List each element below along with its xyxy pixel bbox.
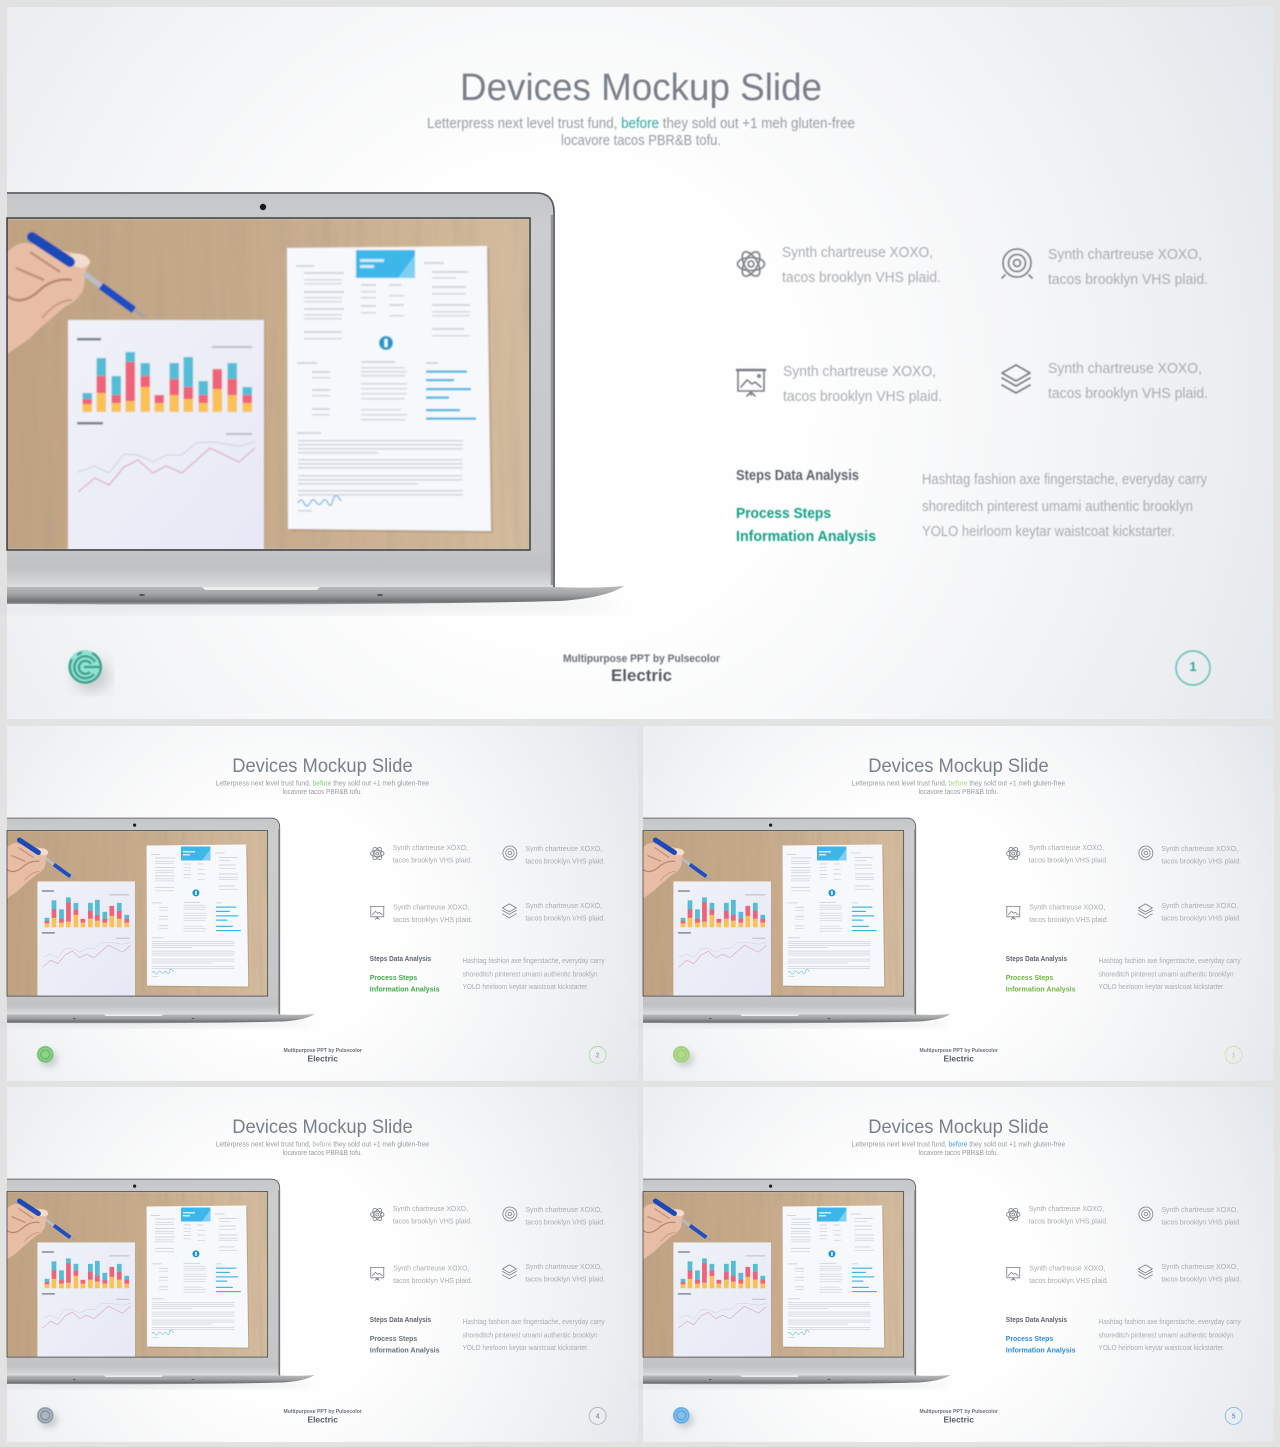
feature grid: Synth chartreuse XOXO, [525, 1205, 602, 1214]
title: Devices Mockup Slide [232, 756, 413, 777]
headings and paragraph [370, 1315, 605, 1355]
headings and paragraph: Steps Data Analysis [370, 1315, 431, 1324]
subtitle text [216, 1140, 429, 1157]
feature grid: Synth chartreuse XOXO, [525, 901, 602, 910]
subtitle text: Letterpress next level trust fund, before they sold out +1 meh gluten-free [216, 779, 429, 788]
headings and paragraph: shoreditch pinterest umami authentic brooklyn [1099, 970, 1234, 979]
headings and paragraph: YOLO heirloom keytar waistcoat kickstarter. [1099, 1343, 1225, 1352]
headings and paragraph: Information Analysis [1006, 985, 1076, 994]
feature grid: Synth chartreuse XOXO, [1029, 843, 1104, 852]
feature grid: Synth chartreuse XOXO, [393, 902, 470, 911]
icon: layers [1002, 365, 1030, 393]
feature grid: Synth chartreuse XOXO, [525, 844, 602, 853]
feature text: layers [1048, 361, 1208, 402]
feature grid: Synth chartreuse XOXO, [1029, 1263, 1106, 1272]
feature grid: tacos brooklyn VHS plaid. [393, 855, 472, 864]
subtitle text [852, 1140, 1065, 1157]
panel: main slide [0, 7, 1273, 719]
page number [1176, 651, 1210, 685]
subtitle text: locavore tacos PBR&B tofu. [283, 787, 362, 796]
title: Devices Mockup Slide [232, 1117, 413, 1138]
headings and paragraph: Steps Data Analysis [370, 954, 431, 963]
subtitle text: Letterpress next level trust fund, before they sold out +1 meh gluten-free [427, 116, 855, 132]
page number: 1 [1232, 1052, 1236, 1059]
feature text: atom: Synth chartreuse XOXO, [782, 245, 933, 261]
heading: process steps [736, 505, 876, 545]
paragraph: Hashtag fashion axe fingerstache, everyday carry [922, 472, 1208, 488]
feature grid: Synth chartreuse XOXO, [1029, 1204, 1104, 1213]
title: Devices Mockup Slide [868, 1117, 1049, 1138]
panel: slide thumbnail 2 [0, 726, 638, 1081]
subtitle text: locavore tacos PBR&B tofu. [561, 133, 721, 149]
headings and paragraph [1006, 1315, 1241, 1355]
headings and paragraph: YOLO heirloom keytar waistcoat kickstarter. [463, 1343, 589, 1352]
headings and paragraph: shoreditch pinterest umami authentic brooklyn [463, 970, 598, 979]
title: Devices Mockup Slide [460, 67, 822, 109]
feature text: target: Synth chartreuse XOXO, [1048, 247, 1202, 263]
feature grid: tacos brooklyn VHS plaid. [525, 913, 605, 922]
feature grid: tacos brooklyn VHS plaid. [1029, 915, 1108, 924]
headings and paragraph: YOLO heirloom keytar waistcoat kickstarter. [1099, 982, 1225, 991]
feature grid [370, 1204, 605, 1285]
feature grid: Synth chartreuse XOXO, [1161, 844, 1238, 853]
feature text: atom: tacos brooklyn VHS plaid. [782, 270, 941, 286]
feature text: target [1048, 247, 1208, 288]
feature text: layers: Synth chartreuse XOXO, [1048, 361, 1202, 377]
paragraph: YOLO heirloom keytar waistcoat kickstarter. [922, 524, 1175, 540]
feature grid: Synth chartreuse XOXO, [393, 1263, 470, 1272]
footer text: Electric [943, 1053, 974, 1063]
icon: atom [738, 249, 764, 279]
footer text [920, 1048, 999, 1063]
laptop mockup [0, 818, 315, 1026]
subtitle text: Letterpress next level trust fund, before they sold out +1 meh gluten-free [216, 1140, 429, 1149]
headings and paragraph: Process Steps [1006, 973, 1053, 982]
headings and paragraph: Steps Data Analysis [1006, 954, 1067, 963]
headings and paragraph: Information Analysis [370, 1346, 440, 1355]
logo [37, 1046, 58, 1067]
subtitle text: Letterpress next level trust fund, before they sold out +1 meh gluten-free [852, 779, 1065, 788]
feature grid: tacos brooklyn VHS plaid. [1161, 856, 1241, 865]
feature text: layers: tacos brooklyn VHS plaid. [1048, 386, 1208, 402]
page number [589, 1046, 606, 1063]
page number: 5 [1232, 1413, 1236, 1420]
page number [1225, 1046, 1242, 1063]
feature text: presentation: tacos brooklyn VHS plaid. [783, 389, 942, 405]
headings and paragraph: Steps Data Analysis [1006, 1315, 1067, 1324]
headings and paragraph: Process Steps [1006, 1334, 1053, 1343]
headings and paragraph: Hashtag fashion axe fingerstache, everyday carry [463, 956, 605, 965]
feature grid: tacos brooklyn VHS plaid. [393, 1216, 472, 1225]
page number [589, 1407, 606, 1424]
feature grid: tacos brooklyn VHS plaid. [525, 1274, 605, 1283]
icon: target [1002, 249, 1032, 278]
footer text [284, 1409, 363, 1424]
headings and paragraph: Hashtag fashion axe fingerstache, everyday carry [1099, 1317, 1241, 1326]
footer text: Multipurpose PPT by Pulsecolor [284, 1409, 363, 1415]
panel: slide thumbnail 4 [0, 1087, 638, 1442]
paragraph: shoreditch pinterest umami authentic brooklyn [922, 499, 1193, 515]
headings and paragraph: Process Steps [370, 973, 417, 982]
feature text: presentation: Synth chartreuse XOXO, [783, 364, 936, 380]
feature text: presentation [783, 364, 942, 405]
laptop mockup [0, 1179, 315, 1387]
footer text [920, 1409, 999, 1424]
headings and paragraph [370, 954, 605, 994]
panel: slide thumbnail 3 [630, 726, 1274, 1081]
footer text: Electric [307, 1053, 338, 1063]
feature grid: tacos brooklyn VHS plaid. [393, 915, 472, 924]
title: Devices Mockup Slide [868, 756, 1049, 777]
feature grid: Synth chartreuse XOXO, [393, 1204, 468, 1213]
headings and paragraph: Hashtag fashion axe fingerstache, everyday carry [1099, 956, 1241, 965]
feature grid: tacos brooklyn VHS plaid. [393, 1276, 472, 1285]
page number: 1 [1189, 659, 1197, 674]
laptop mockup with photo of charts and resume [0, 192, 624, 611]
headings and paragraph: shoreditch pinterest umami authentic brooklyn [463, 1331, 598, 1340]
feature text: atom [782, 245, 941, 286]
feature grid: tacos brooklyn VHS plaid. [525, 1217, 605, 1226]
feature grid: tacos brooklyn VHS plaid. [525, 856, 605, 865]
headings and paragraph: Process Steps [370, 1334, 417, 1343]
headings and paragraph: Information Analysis [370, 985, 440, 994]
heading: process steps: Information Analysis [736, 528, 876, 545]
footer text [563, 653, 721, 685]
logo [673, 1046, 694, 1067]
footer text: Multipurpose PPT by Pulsecolor [284, 1048, 363, 1054]
feature grid: Synth chartreuse XOXO, [1029, 902, 1106, 911]
page number: 2 [596, 1052, 600, 1059]
laptop mockup [630, 818, 951, 1026]
footer text: Multipurpose PPT by Pulsecolor [920, 1048, 999, 1054]
feature grid: Synth chartreuse XOXO, [525, 1262, 602, 1271]
feature grid: tacos brooklyn VHS plaid. [1029, 1276, 1108, 1285]
panel: slide thumbnail 5 [630, 1087, 1274, 1442]
headings and paragraph: shoreditch pinterest umami authentic brooklyn [1099, 1331, 1234, 1340]
footer text: Electric [611, 666, 672, 685]
footer text: Multipurpose PPT by Pulsecolor [563, 653, 721, 665]
feature grid: tacos brooklyn VHS plaid. [1161, 913, 1241, 922]
headings and paragraph: YOLO heirloom keytar waistcoat kickstarter. [463, 982, 589, 991]
footer text: Multipurpose PPT by Pulsecolor [920, 1409, 999, 1415]
subtitle text: locavore tacos PBR&B tofu. [919, 787, 998, 796]
page number: 4 [596, 1413, 600, 1420]
page number [1225, 1407, 1242, 1424]
footer text: Electric [943, 1414, 974, 1424]
subtitle text: locavore tacos PBR&B tofu. [283, 1148, 362, 1157]
feature grid: tacos brooklyn VHS plaid. [1029, 855, 1108, 864]
footer text: Electric [307, 1414, 338, 1424]
logo [673, 1407, 694, 1428]
feature grid: tacos brooklyn VHS plaid. [1029, 1216, 1108, 1225]
feature grid: Synth chartreuse XOXO, [1161, 1205, 1238, 1214]
footer text [284, 1048, 363, 1063]
feature grid [1006, 1204, 1241, 1285]
feature grid [370, 843, 605, 924]
feature grid [1006, 843, 1241, 924]
feature grid: Synth chartreuse XOXO, [1161, 901, 1238, 910]
heading: process steps: Process Steps [736, 505, 831, 522]
heading: steps data analysis: Steps Data Analysis [736, 467, 859, 484]
headings and paragraph [1006, 954, 1241, 994]
paragraph [922, 472, 1208, 540]
laptop mockup [630, 1179, 951, 1387]
subtitle text [852, 779, 1065, 796]
headings and paragraph: Hashtag fashion axe fingerstache, everyday carry [463, 1317, 605, 1326]
feature grid: Synth chartreuse XOXO, [1161, 1262, 1238, 1271]
subtitle text: locavore tacos PBR&B tofu. [919, 1148, 998, 1157]
logo [68, 650, 110, 692]
feature text: target: tacos brooklyn VHS plaid. [1048, 272, 1208, 288]
subtitle text: Letterpress next level trust fund, before they sold out +1 meh gluten-free [852, 1140, 1065, 1149]
feature grid: Synth chartreuse XOXO, [393, 843, 468, 852]
headings and paragraph: Information Analysis [1006, 1346, 1076, 1355]
feature grid: tacos brooklyn VHS plaid. [1161, 1217, 1241, 1226]
subtitle text [216, 779, 429, 796]
feature grid: tacos brooklyn VHS plaid. [1161, 1274, 1241, 1283]
logo [37, 1407, 58, 1428]
subtitle text [427, 116, 855, 149]
icon: presentation board [737, 370, 765, 396]
